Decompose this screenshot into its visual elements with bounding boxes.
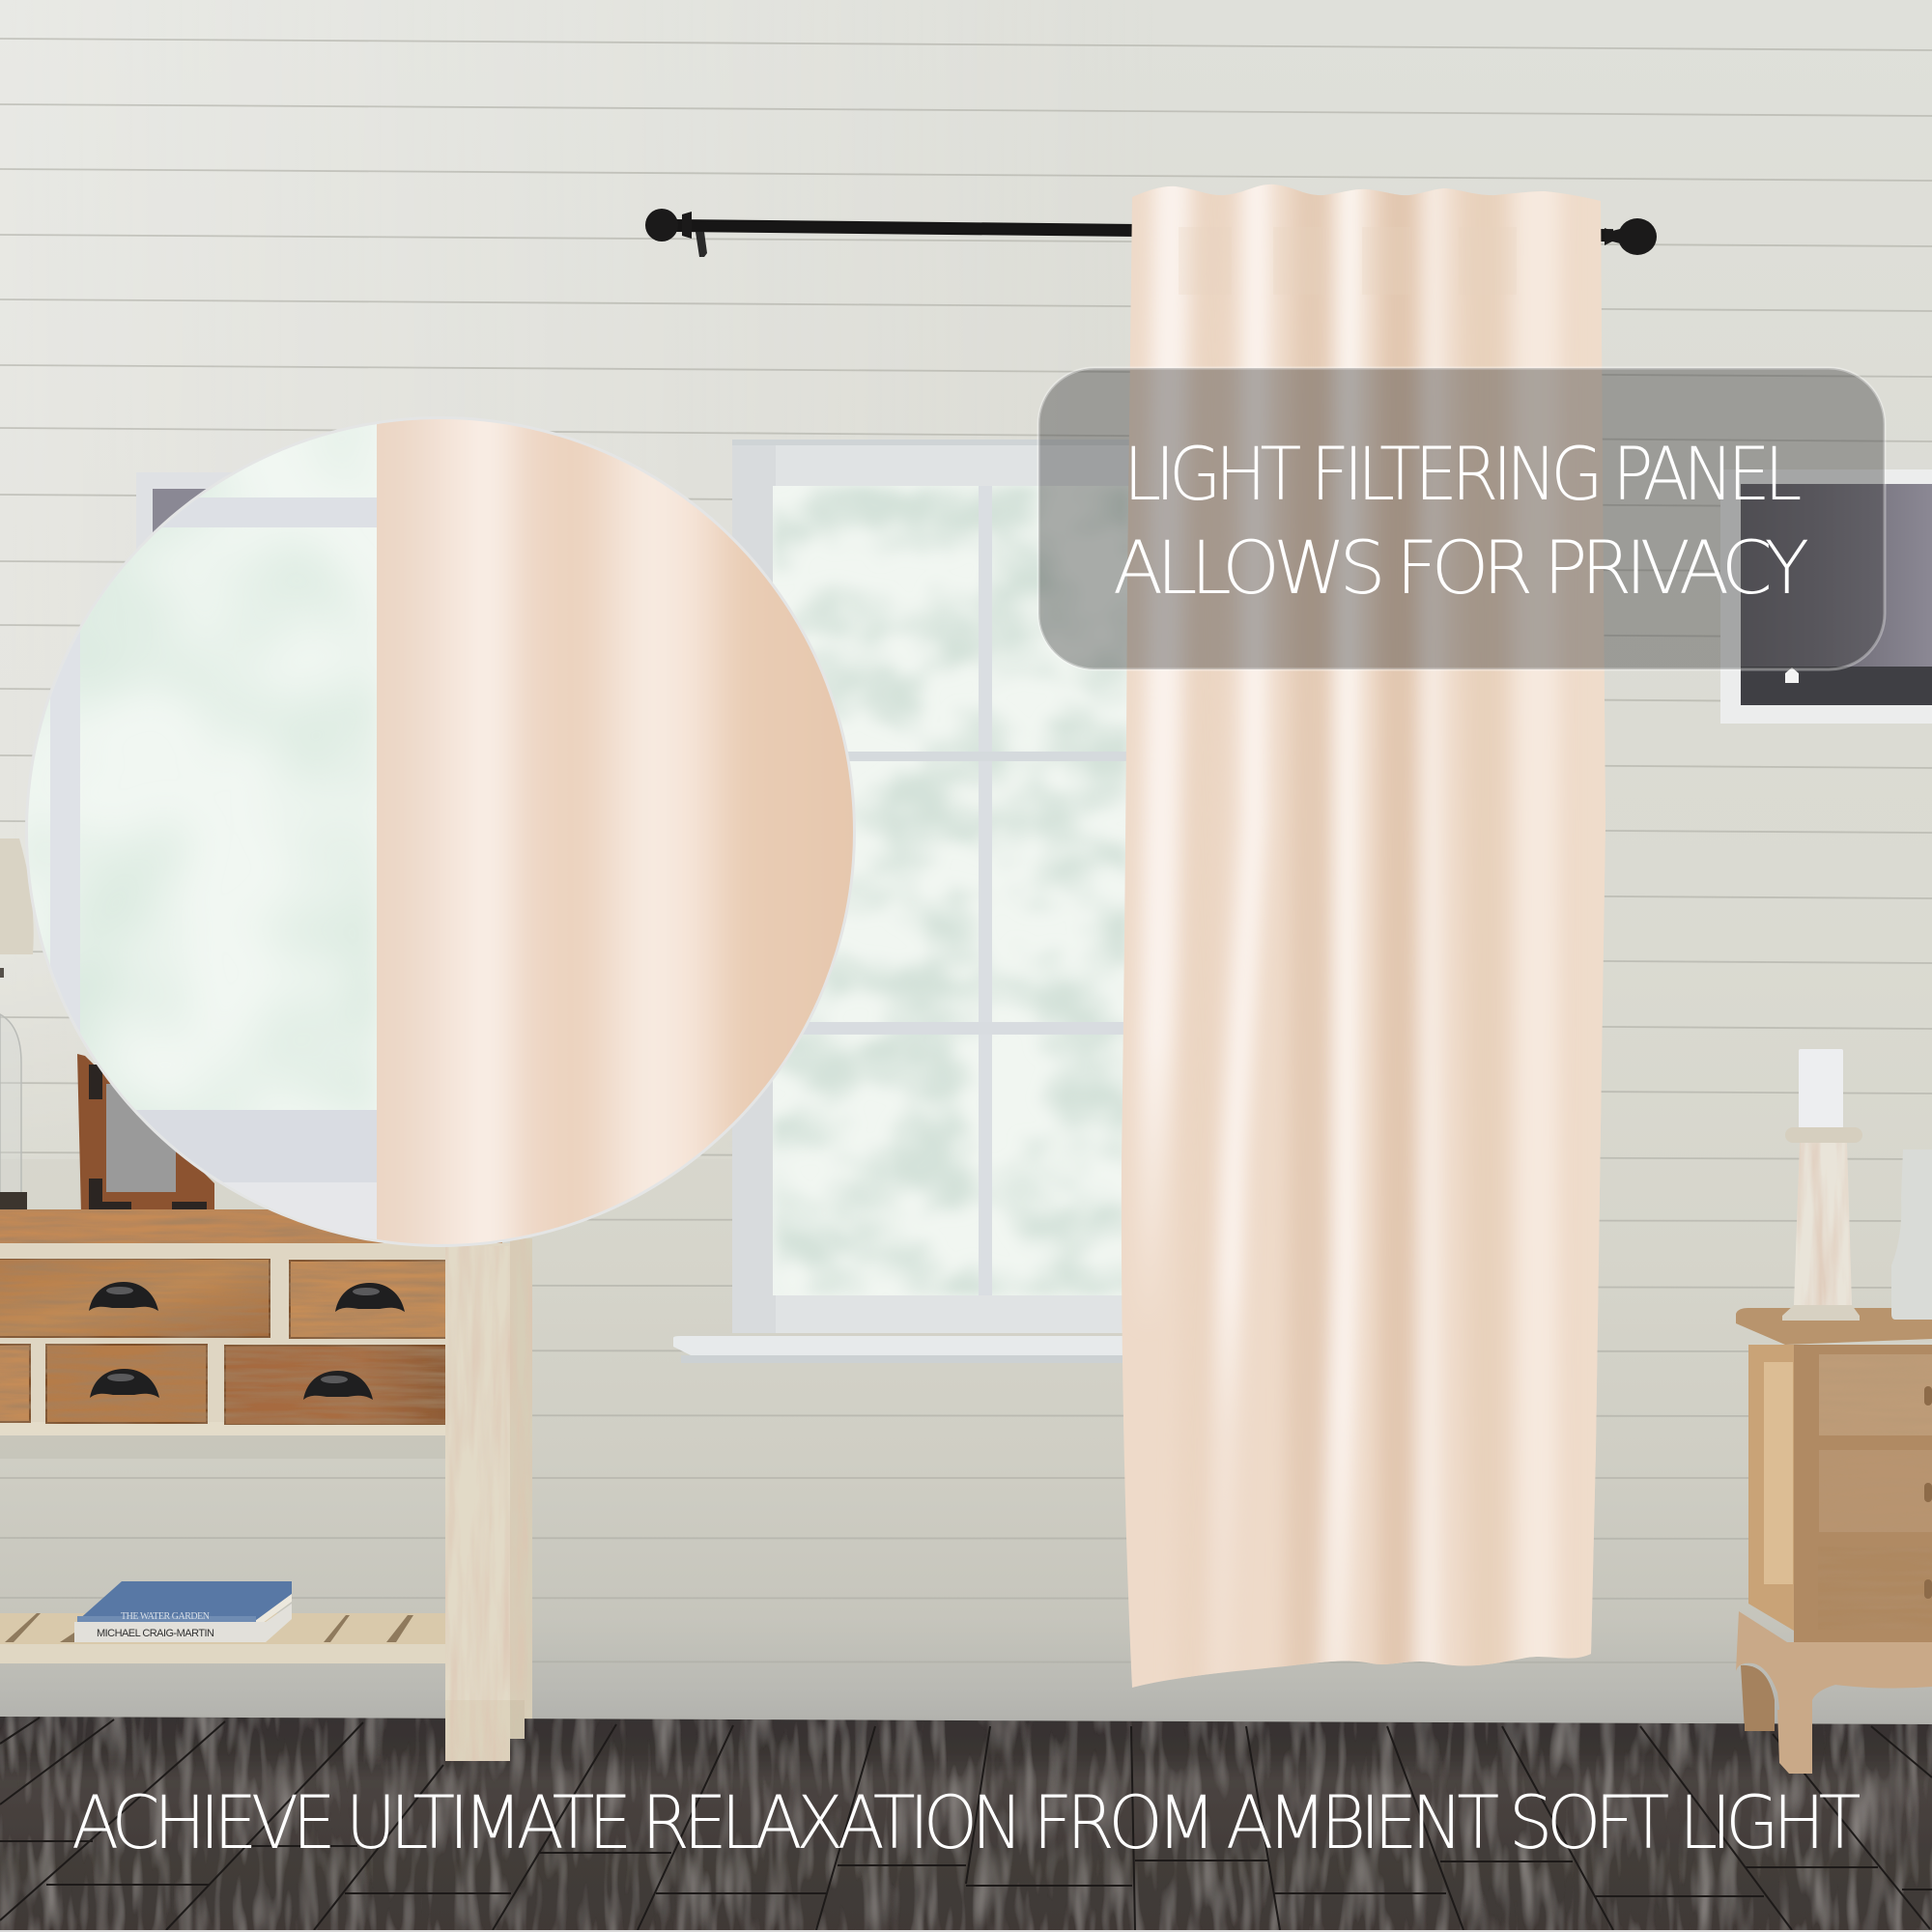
magnified window glass bbox=[28, 424, 377, 1110]
chest feet over floor bbox=[1745, 1710, 1812, 1774]
table legs bbox=[445, 1238, 532, 1761]
chest top bbox=[1736, 1308, 1932, 1345]
picture frame on console bbox=[77, 1054, 214, 1214]
callout panel bbox=[1038, 368, 1885, 669]
drawer cup handles bbox=[89, 1282, 405, 1400]
callout heading bbox=[1113, 431, 1808, 611]
curtain panel bbox=[1111, 164, 1623, 1710]
curtain rod with finials bbox=[645, 209, 1657, 257]
stacked books bbox=[74, 1581, 292, 1642]
stacked books: THE WATER GARDEN bbox=[121, 1611, 210, 1622]
chest front bbox=[1794, 1345, 1932, 1654]
wooden chest of drawers bbox=[1736, 1308, 1932, 1774]
window: frame, panes and foliage bbox=[673, 440, 1130, 1363]
magnified detail circle bbox=[19, 415, 908, 1251]
bottom caption: ACHIEVE ULTIMATE RELAXATION FROM AMBIENT SOFT LIGHT bbox=[71, 1779, 1860, 1865]
window sill bbox=[673, 1336, 1130, 1355]
framed photo on right wall bbox=[1720, 469, 1932, 724]
callout heading: LIGHT FILTERING PANEL bbox=[1123, 431, 1800, 517]
magnified curtain bbox=[377, 419, 853, 1244]
magnified window frame bbox=[162, 497, 377, 527]
stacked books: MICHAEL CRAIG-MARTIN bbox=[97, 1628, 214, 1639]
table leg feet over floor bbox=[445, 1700, 525, 1761]
chest side bbox=[1748, 1345, 1794, 1631]
table top bbox=[0, 1209, 502, 1246]
chest base, apron and legs bbox=[1736, 1611, 1932, 1774]
callout heading: ALLOWS FOR PRIVACY bbox=[1113, 525, 1808, 611]
console table bbox=[0, 1209, 532, 1761]
table frame bbox=[0, 1243, 510, 1435]
candle on pillar bbox=[1782, 1049, 1862, 1321]
dark wood plank floor bbox=[0, 1717, 1932, 1932]
lower wall shadow bbox=[0, 1435, 445, 1459]
burlap lamp and glass cloche at far left bbox=[0, 838, 34, 1213]
framed photo on left wall bbox=[136, 472, 291, 588]
chest drawers bbox=[1818, 1354, 1932, 1630]
slatted shelf bbox=[0, 1613, 445, 1663]
ceramic vase bbox=[1891, 1150, 1932, 1320]
drawers bbox=[0, 1259, 452, 1425]
